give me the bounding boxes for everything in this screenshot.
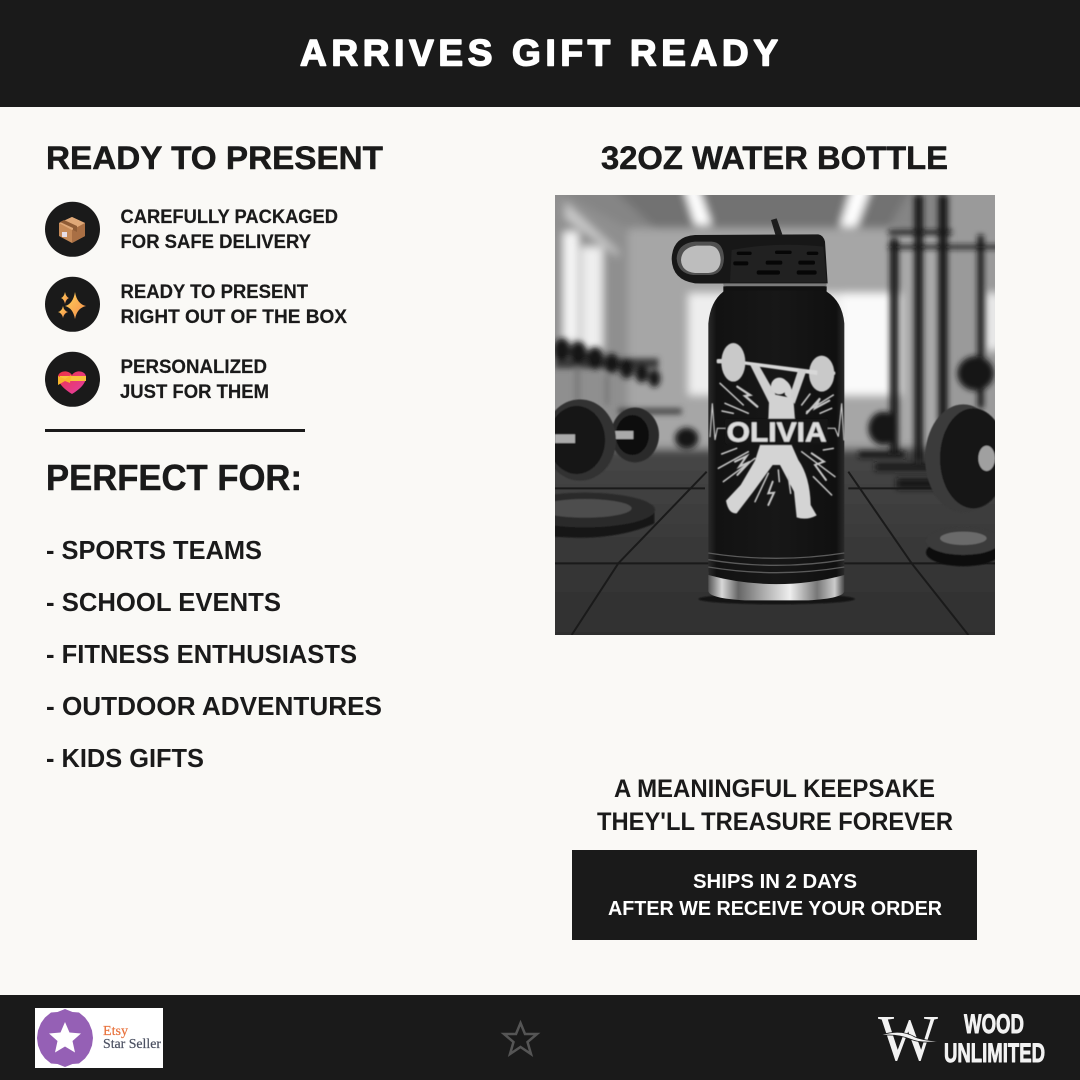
floor tile lines [555, 472, 995, 635]
engraving: weightlifter and name [710, 343, 844, 519]
badge: etsy star seller [35, 1008, 163, 1068]
feature: carefully packaged: CAREFULLY PACKAGED [120, 206, 338, 228]
footer bar [0, 995, 1080, 1080]
logo: wood unlimited: W [878, 1002, 939, 1075]
logo: wood unlimited: WOOD [964, 1009, 1024, 1039]
feature: personalized: PERSONALIZED [120, 356, 267, 378]
bottle [672, 218, 855, 604]
keepsake text: THEY'LL TREASURE FOREVER [597, 808, 953, 836]
feature: ready right out of the box: RIGHT OUT OF THE BOX [120, 306, 347, 328]
badge: etsy star seller: Star Seller [103, 1037, 161, 1052]
panel: ready to present [45, 140, 383, 407]
product photo: engraved water bottle in gym [555, 195, 995, 635]
list of audiences: - OUTDOOR ADVENTURES [46, 691, 382, 721]
feature: carefully packaged [45, 202, 338, 257]
weight plates [515, 399, 1007, 566]
shipping callout: SHIPS IN 2 DAYS [693, 871, 857, 893]
badge: etsy star seller: Etsy [103, 1024, 128, 1039]
heading: ready to present: READY TO PRESENT [46, 140, 383, 176]
logo: wood unlimited [878, 1002, 1045, 1075]
feature: ready right out of the box: READY TO PRESENT [120, 281, 308, 303]
bottle cap [672, 218, 828, 283]
panel: perfect for [46, 457, 382, 773]
keepsake text [597, 775, 953, 836]
panel: keepsake message [572, 775, 977, 940]
list of audiences: - FITNESS ENTHUSIASTS [46, 639, 357, 669]
icon: star [504, 1023, 537, 1054]
title: ARRIVES GIFT READY [300, 32, 778, 74]
list of audiences: - SCHOOL EVENTS [46, 587, 281, 617]
keepsake text: A MEANINGFUL KEEPSAKE [614, 775, 935, 803]
feature: ready right out of the box [45, 277, 347, 332]
engraving: weightlifter and name: OLIVIA [727, 416, 827, 447]
gym equipment background [553, 195, 1002, 489]
heading: perfect for: PERFECT FOR: [46, 457, 302, 498]
heading: product name: 32OZ WATER BOTTLE [601, 140, 948, 176]
feature: personalized: JUST FOR THEM [120, 381, 269, 403]
list of audiences [46, 535, 382, 773]
shipping callout: AFTER WE RECEIVE YOUR ORDER [608, 898, 943, 920]
shipping callout [572, 850, 977, 940]
feature: personalized [45, 352, 269, 407]
feature: carefully packaged: FOR SAFE DELIVERY [120, 231, 311, 253]
list of audiences: - KIDS GIFTS [46, 743, 204, 773]
header banner [0, 0, 1080, 107]
list of audiences: - SPORTS TEAMS [46, 535, 262, 565]
